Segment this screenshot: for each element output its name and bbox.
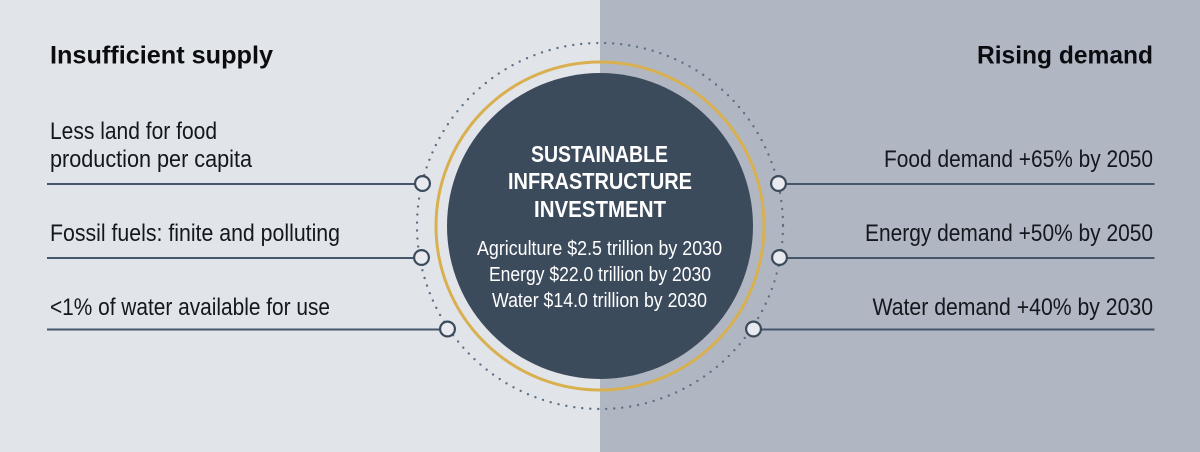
demand item: water: Water demand +40% by 2030 [872, 294, 1153, 321]
heading: rising demand: Rising demand [977, 42, 1153, 70]
panel: rising demand background [600, 0, 1200, 452]
demand item: water [746, 294, 1154, 336]
heading: insufficient supply: Insufficient supply [50, 42, 273, 70]
central heading: SUSTAINABLE [531, 141, 668, 167]
investment figures: Energy $22.0 trillion by 2030 [489, 264, 711, 286]
investment figures: Agriculture $2.5 trillion by 2030 [477, 238, 722, 260]
supply item: land [47, 118, 430, 191]
demand item: energy: Energy demand +50% by 2050 [865, 220, 1153, 247]
central heading: INFRASTRUCTURE [508, 168, 692, 194]
supply item: land: Less land for food [50, 118, 217, 145]
demand item: food: Food demand +65% by 2050 [884, 146, 1153, 173]
central heading: INVESTMENT [534, 196, 666, 222]
investment figures: Water $14.0 trillion by 2030 [492, 290, 707, 312]
gold ring [436, 62, 764, 390]
supply item: fossil fuels: Fossil fuels: finite and polluting [50, 220, 340, 247]
central heading [508, 141, 692, 222]
panel: insufficient supply background [0, 0, 600, 452]
demand item: energy [772, 220, 1154, 265]
central circle [447, 73, 753, 379]
demand item: food [771, 146, 1154, 191]
supply item: water [47, 294, 455, 336]
supply item: land: production per capita [50, 146, 253, 173]
dotted outer ring [417, 43, 783, 409]
supply item: water: <1% of water available for use [50, 294, 330, 321]
supply item: fossil fuels [47, 220, 429, 265]
investment figures [477, 238, 722, 312]
